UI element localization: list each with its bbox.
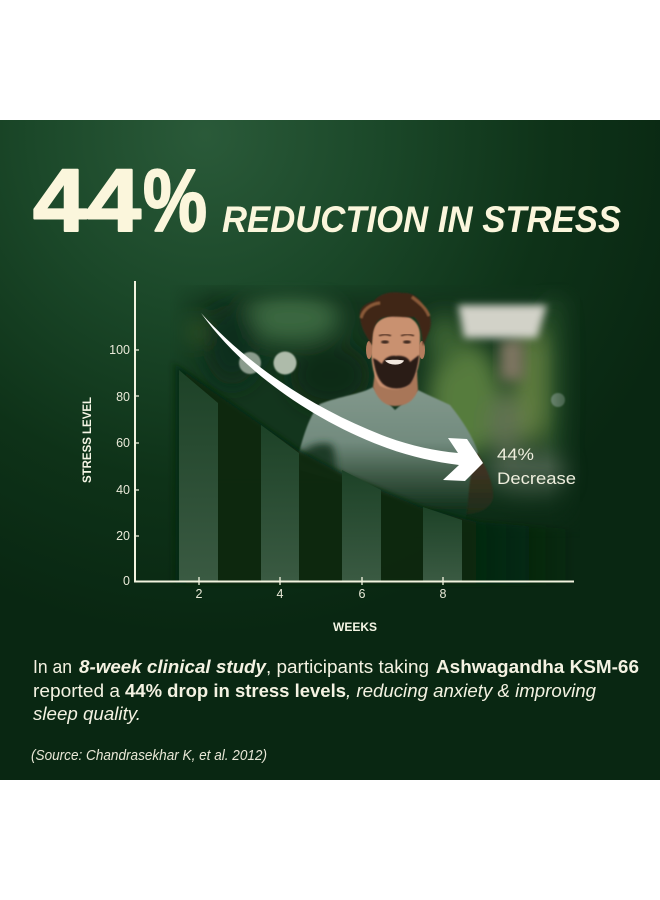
man: face xyxy=(371,315,420,389)
x axis title: WEEKS xyxy=(333,620,377,634)
body text: In an xyxy=(33,656,72,677)
photo: smiling man xyxy=(298,292,493,520)
body text: 8-week clinical study xyxy=(79,656,268,677)
body text xyxy=(33,656,639,724)
callout: 44% decrease xyxy=(497,445,576,488)
x axis labels: 6 xyxy=(359,587,366,601)
photo: distant building xyxy=(500,340,524,380)
y axis labels: 0 xyxy=(123,574,130,588)
man: ears xyxy=(366,341,372,359)
x axis labels: 8 xyxy=(440,587,447,601)
y axis title: STRESS LEVEL xyxy=(80,397,94,483)
callout: 44% decrease: 44% xyxy=(497,445,534,464)
bar: week 2 xyxy=(179,370,218,581)
bar: week 8 xyxy=(423,507,462,581)
source citation: (Source: Chandrasekhar K, et al. 2012) xyxy=(31,748,267,764)
body text: , reducing anxiety & improving xyxy=(346,680,597,701)
photo: blurred lamp globes xyxy=(239,352,565,407)
man: smile xyxy=(385,360,404,365)
title: 44 xyxy=(33,150,142,250)
title xyxy=(33,150,621,250)
x axis labels: 4 xyxy=(277,587,284,601)
body text: , participants taking xyxy=(266,656,429,677)
arrow: downward trend xyxy=(201,313,483,481)
callout: 44% decrease: Decrease xyxy=(497,469,576,488)
bar: week 6 xyxy=(342,470,381,581)
body text: reported a xyxy=(33,680,121,701)
x axis labels: 2 xyxy=(196,587,203,601)
dark diagonal chart shade xyxy=(170,360,580,584)
y axis labels: 80 xyxy=(116,390,130,404)
man: eyes and brows xyxy=(381,340,389,344)
body text: sleep quality. xyxy=(33,703,141,724)
y axis labels: 100 xyxy=(109,343,130,357)
title: % xyxy=(143,151,207,250)
man: shirt xyxy=(298,387,478,520)
body text: Ashwagandha KSM-66 xyxy=(436,656,639,677)
body text: 44% drop in stress levels xyxy=(125,680,346,701)
x axis labels xyxy=(196,587,447,601)
y axis labels: 20 xyxy=(116,529,130,543)
y axis labels: 60 xyxy=(116,436,130,450)
title: REDUCTION IN STRESS xyxy=(222,199,621,240)
man: neck xyxy=(373,372,418,406)
man: left arm shadow xyxy=(298,443,336,475)
chart axes xyxy=(135,281,574,585)
y axis labels: 40 xyxy=(116,483,130,497)
photo: bright sky patch xyxy=(458,305,547,338)
man: beard xyxy=(373,355,419,388)
panel: dark green background xyxy=(0,120,660,780)
y axis labels xyxy=(109,343,130,588)
bar: week 4 xyxy=(261,425,299,581)
man: curly hair xyxy=(360,292,431,346)
photo: blurred park background xyxy=(186,288,576,507)
bar chart: stress level bars xyxy=(179,370,462,581)
man: right arm xyxy=(445,448,493,514)
